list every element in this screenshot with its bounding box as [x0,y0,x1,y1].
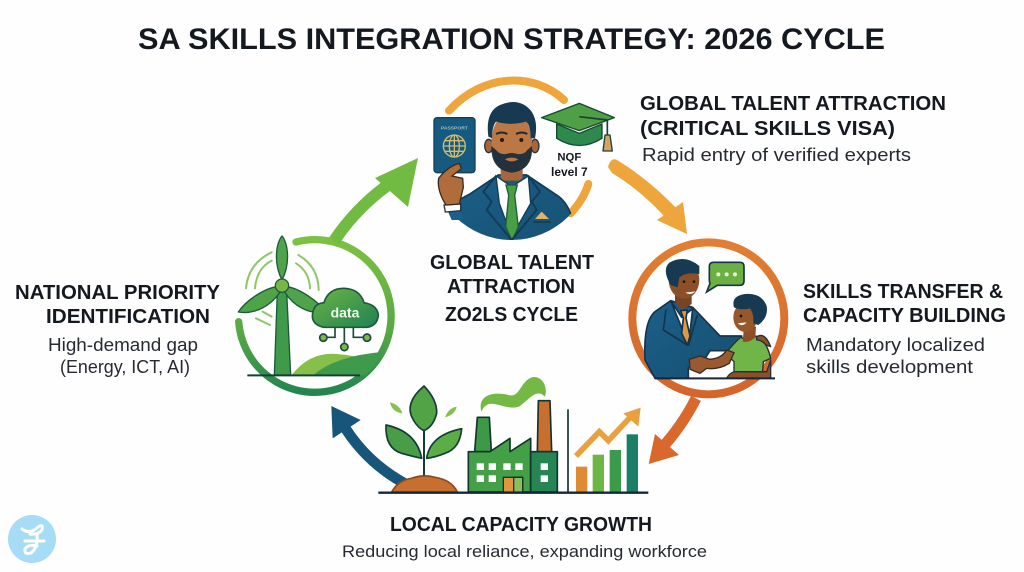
ground line [378,489,648,496]
heading and text: skills transfer: CAPACITY BUILDING [803,305,1006,327]
data cloud [312,288,378,351]
logo badge [8,515,56,563]
heading and text: national priority: High-demand gap [48,335,198,355]
heading and text: skills transfer: SKILLS TRANSFER & [803,281,1003,303]
heading and text: national priority [15,282,221,377]
heading and text: local capacity growth: LOCAL CAPACITY GROWTH [390,514,652,536]
title: SA SKILLS INTEGRATION STRATEGY: 2026 CYCLE [138,23,885,56]
bar chart with rising arrow [568,408,641,492]
heading and text: skills transfer: skills development [806,357,973,377]
center label: GLOBAL TALENT [430,252,594,274]
center label: ZO2LS CYCLE [445,304,578,326]
factory [468,377,557,492]
ground line [655,375,775,381]
orange ring and arrow [632,242,784,464]
heading and text: global talent attraction: GLOBAL TALENT ATTRACTION [640,93,946,115]
panel: skills transfer icon [632,242,784,464]
orange ring arcs [449,80,588,213]
mentor [645,259,742,378]
man in suit [458,102,572,240]
heading and text: global talent attraction: (CRITICAL SKILLS VISA) [640,118,895,140]
hills [292,352,378,375]
wind waves [246,252,319,325]
data cloud: data [331,304,360,320]
heading and text: national priority: NATIONAL PRIORITY [15,282,221,304]
graduation cap [542,103,614,151]
heading and text: skills transfer [803,281,1006,377]
heading and text: global talent attraction: Rapid entry of verified experts [642,145,911,165]
wind turbine [238,236,326,375]
handshake [689,350,734,373]
ground line [247,372,360,378]
panel: national priority icon [238,236,393,392]
heading and text: local capacity growth [342,514,707,561]
passport [434,118,475,173]
heading and text: local capacity growth: Reducing local reliance, expanding workforce [342,542,707,561]
NQF level label: NQF [557,152,581,164]
heading and text: national priority: (Energy, ICT, AI) [60,357,190,377]
boy [726,294,771,378]
NQF level label [551,152,588,179]
navy arrow [331,406,407,485]
heading and text: skills transfer: Mandatory localized [806,335,985,355]
heading and text: global talent attraction [640,93,946,165]
heading and text: national priority: IDENTIFICATION [46,306,210,328]
NQF level label: level 7 [551,165,588,179]
panel: local capacity growth icons [331,377,648,493]
sprout [386,386,462,492]
arrow: top to right [608,159,687,234]
center label: ATTRACTION [447,276,575,298]
passport: PASSPORT [441,125,468,131]
center label [430,252,594,326]
hand and cuff [438,163,463,220]
panel: global talent icon [434,80,614,257]
arrow: left to top [334,158,418,241]
speech bubble [707,262,744,292]
green ring [239,240,391,392]
